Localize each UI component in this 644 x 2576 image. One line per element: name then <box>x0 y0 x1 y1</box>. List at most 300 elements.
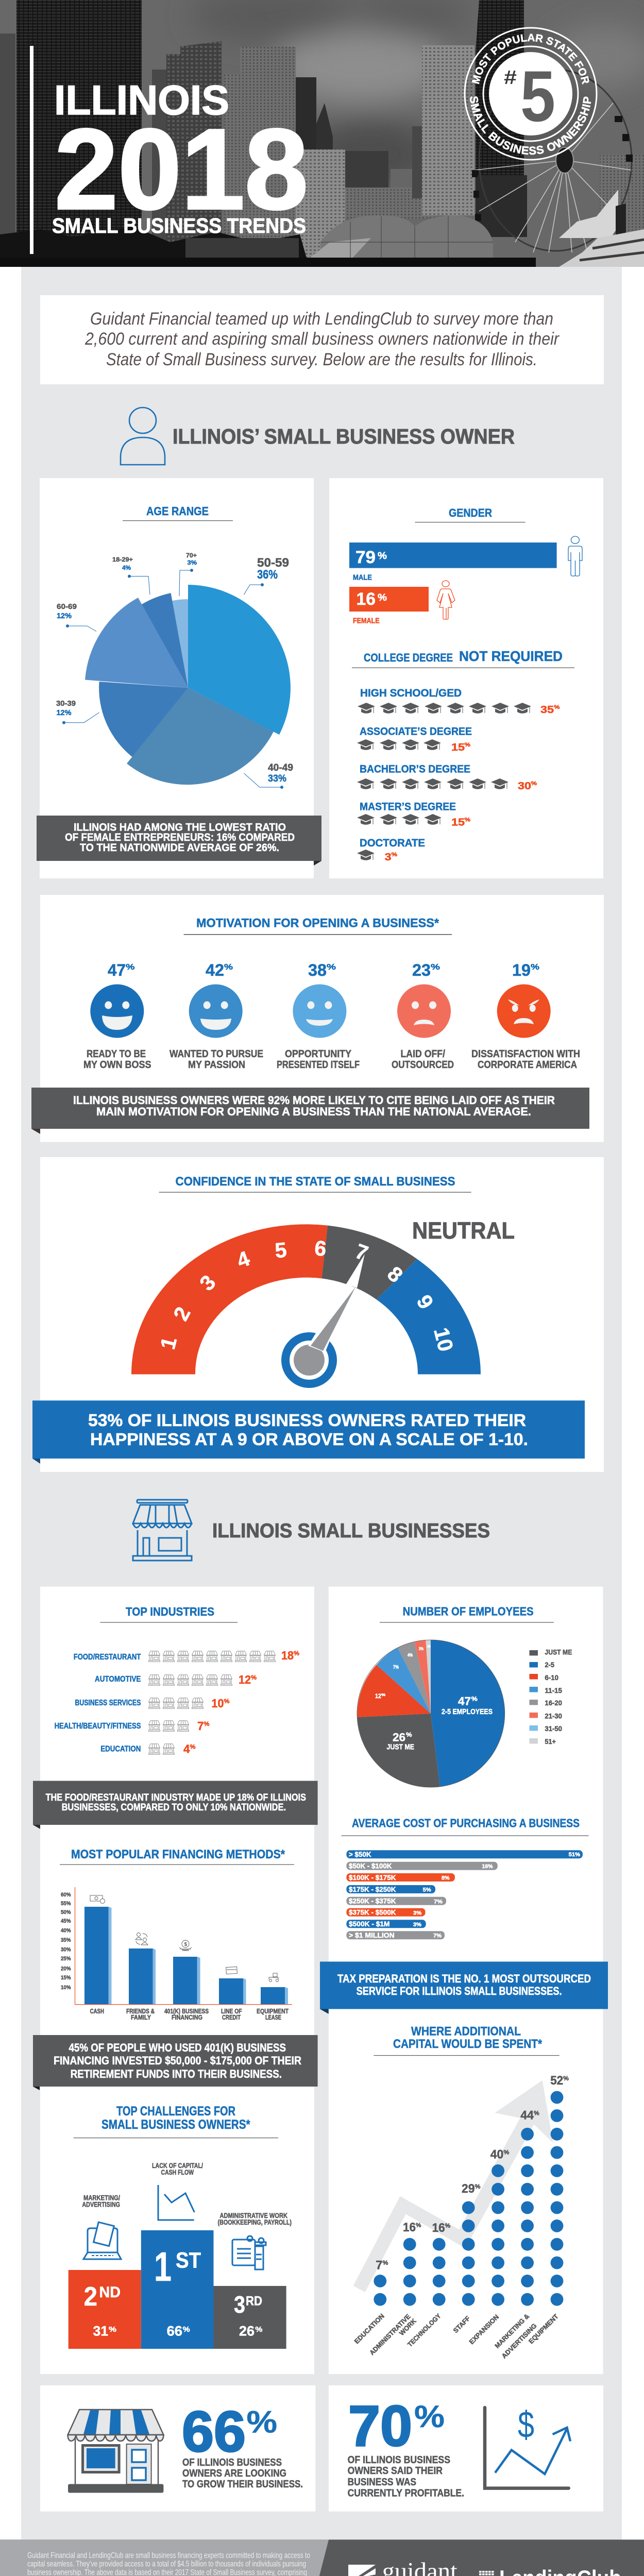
dot chart percentages: 44 <box>520 2108 534 2122</box>
motivation: 19% dissatisfaction: CORPORATE AMERICA <box>478 1059 577 1071</box>
podium: challenges: CASH FLOW <box>161 2168 194 2176</box>
pie labels: 4% <box>122 564 131 571</box>
callout: tax preparation: TAX PREPARATION IS THE NO. 1 MOST OUTSOURCED <box>337 1972 591 1985</box>
motivation: 19% dissatisfaction: DISSATISFACTION WITH <box>471 1048 580 1060</box>
pie chart: employees: % <box>381 1693 386 1697</box>
gauge: 8 <box>383 1262 408 1287</box>
badge: #5 most popular state: SMALL BUSINESS OWNERSHIP <box>470 96 591 155</box>
callout: happiness: HAPPINESS AT A 9 OR ABOVE ON A SCALE OF 1-10. <box>90 1430 528 1449</box>
bar chart: financing methods: 45% <box>61 1918 71 1924</box>
degree row: associate's: % <box>465 742 470 748</box>
bar chart: average cost: $375K - $500K <box>349 1908 396 1917</box>
bar chart: average cost: $100K - $175K <box>349 1873 396 1882</box>
podium: 2nd: 31 <box>93 2323 108 2338</box>
motivation: 38% opportunity: OPPORTUNITY <box>285 1048 352 1060</box>
icon: storefront outline <box>133 1500 192 1561</box>
bar chart: financing methods: 60% <box>61 1892 71 1898</box>
heading: college degree not required: COLLEGE DEGREE <box>364 651 453 664</box>
industry row: health <box>55 1719 210 1733</box>
heading: additional capital: WHERE ADDITIONAL <box>411 2025 521 2039</box>
hero photo: Chicago skyline <box>0 0 644 267</box>
industry row: food <box>74 1649 299 1662</box>
bar chart: financing methods: CASH <box>90 2008 104 2015</box>
podium: challenges: ADMINISTRATIVE WORK <box>219 2211 287 2219</box>
degree row: doctorate: 3 <box>385 852 392 863</box>
dot chart percentages: 16 <box>403 2221 416 2234</box>
dot chart category labels <box>353 2312 560 2360</box>
heading: additional capital <box>393 2025 543 2051</box>
pie chart: employees: 1% <box>428 1645 431 1649</box>
pie chart: age range <box>85 585 291 785</box>
bar chart: financing methods: 30% <box>61 1946 71 1953</box>
podium: 2nd: % <box>109 2325 116 2334</box>
heading: motivation: MOTIVATION FOR OPENING A BUSINESS* <box>196 917 439 930</box>
heading: confidence: CONFIDENCE IN THE STATE OF SMALL BUSINESS <box>175 1175 455 1189</box>
podium: challenges: (BOOKKEEPING, PAYROLL) <box>217 2218 292 2226</box>
heading: additional capital: CAPITAL WOULD BE SPENT* <box>393 2037 543 2051</box>
bar chart: average cost: 7% <box>433 1933 442 1939</box>
callout: female entrepreneurs: ILLINOIS HAD AMONG THE LOWEST RATIO <box>74 821 286 834</box>
motivation: 42% pursue my passion: 42 <box>206 961 224 979</box>
gauge: 7 <box>352 1239 371 1265</box>
icon: credit card <box>226 1967 237 1974</box>
pie labels: 60-69 <box>57 602 77 611</box>
icon: laptop <box>83 2222 121 2259</box>
industry row: business services <box>75 1697 230 1710</box>
podium: 1st: ST <box>176 2248 201 2273</box>
motivation: 19% dissatisfaction: % <box>531 963 539 972</box>
pie labels: 36% <box>257 568 278 582</box>
heading: number of employees: NUMBER OF EMPLOYEES <box>403 1605 534 1618</box>
column: equipment <box>551 2091 563 2306</box>
icon: profit chart <box>485 2404 570 2488</box>
dot chart category labels: EQUIPMENT <box>527 2312 560 2345</box>
pie leader lines <box>62 569 283 789</box>
degree row: associate's <box>357 725 472 753</box>
callout: food industry: BUSINESSES, COMPARED TO ONLY 10% NATIONWIDE. <box>62 1802 286 1813</box>
heading: college degree not required: NOT REQUIRED <box>459 648 563 664</box>
degree row: doctorate: % <box>392 852 397 858</box>
callout: 401k: 45% OF PEOPLE WHO USED 401(K) BUSINESS <box>69 2041 286 2054</box>
pie chart: employees: 3% <box>419 1647 423 1651</box>
callout: laid off <box>31 1088 589 1134</box>
dot chart percentages: 29 <box>462 2182 475 2196</box>
pie labels: 3% <box>188 559 197 566</box>
pie chart: employees <box>357 1640 505 1787</box>
degree row: master's <box>357 801 470 828</box>
dot chart percentages: % <box>563 2075 569 2082</box>
icon: cash <box>90 1895 105 1903</box>
industry row: automotive: 12 <box>239 1673 251 1686</box>
motivation: 47% ready to be my own boss <box>83 961 151 1071</box>
legend: employees: 11-15 <box>545 1686 562 1694</box>
pie labels <box>56 552 293 784</box>
panel: intro: State of Small Business survey. Below are the results for Illinois. <box>106 350 537 369</box>
badge: #5 most popular state <box>464 27 598 161</box>
dot chart percentages: % <box>416 2222 421 2229</box>
bar chart: financing methods: FAMILY <box>131 2014 151 2021</box>
industry row: business services: BUSINESS SERVICES <box>75 1699 141 1707</box>
panel: intro: 2,600 current and aspiring small business owners nationwide in their <box>84 329 560 349</box>
motivation: 42% pursue my passion: MY PASSION <box>188 1059 245 1071</box>
heading: top challenges <box>101 2104 250 2132</box>
gauge: 10 <box>429 1325 458 1354</box>
industry row: education <box>100 1742 196 1756</box>
hero accent bar <box>30 46 33 254</box>
legend: employees: JUST ME <box>545 1648 572 1656</box>
gauge: 6 <box>314 1236 327 1261</box>
industry row: food: % <box>294 1650 299 1657</box>
stat: 70% <box>348 2394 464 2499</box>
legend: employees: 6-10 <box>545 1673 558 1682</box>
female bar: FEMALE <box>353 616 380 625</box>
bar chart: average cost: 5% <box>423 1887 431 1893</box>
dot chart category labels: EDUCATION <box>353 2312 386 2345</box>
legend: employees: 51+ <box>545 1737 556 1745</box>
heading: top challenges: TOP CHALLENGES FOR <box>116 2104 235 2119</box>
stat: 66% <box>182 2400 303 2490</box>
bar chart: average cost: 51% <box>569 1852 580 1858</box>
panel: age range <box>40 478 314 878</box>
pie labels: 12% <box>57 612 72 620</box>
bar chart: average cost: $50K - $100K <box>349 1862 392 1870</box>
degree row: master's: 15 <box>451 817 465 828</box>
dot chart category labels: MARKETING & <box>493 2312 531 2350</box>
podium: 1st: 1 <box>154 2244 172 2290</box>
industry row: food: 18 <box>281 1649 294 1662</box>
industry row: health: 7 <box>197 1719 204 1733</box>
footer <box>0 2539 644 2576</box>
dot chart percentages: % <box>475 2183 481 2190</box>
stat: 66%: TO GROW THEIR BUSINESS. <box>182 2479 303 2490</box>
bar chart: financing methods: 10% <box>61 1985 71 1991</box>
degree row: bachelor's: % <box>531 781 537 787</box>
bar chart: financing methods: 35% <box>61 1937 71 1943</box>
male bar <box>349 543 557 582</box>
motivation: 23% laid off: LAID OFF/ <box>401 1048 445 1060</box>
icon: female <box>437 581 455 619</box>
stat: 70%: OWNERS SAID THEIR <box>348 2465 443 2477</box>
podium: 3rd: RD <box>246 2294 262 2309</box>
industry row: business services: % <box>224 1698 230 1705</box>
industry row: automotive <box>95 1673 257 1686</box>
callout: food industry <box>33 1781 318 1829</box>
motivation: 19% dissatisfaction <box>471 961 580 1071</box>
stat: 66%: OWNERS ARE LOOKING <box>182 2468 286 2479</box>
bar chart: average cost: 8% <box>442 1875 450 1882</box>
bar chart: average cost: > $50K <box>349 1850 371 1858</box>
gauge <box>131 1224 481 1388</box>
pie labels: 33% <box>268 773 286 784</box>
motivation: 42% pursue my passion: WANTED TO PURSUE <box>170 1048 263 1060</box>
degree row: doctorate: DOCTORATE <box>360 837 425 849</box>
pie chart: employees: 2-5 EMPLOYEES <box>442 1707 493 1716</box>
gauge: 1 <box>156 1334 181 1352</box>
legend: employees <box>530 1648 572 1745</box>
bar chart: average cost: 3% <box>413 1922 421 1928</box>
degree row: bachelor's: 30 <box>518 781 531 792</box>
pie labels: 12% <box>57 708 71 717</box>
pie chart: employees: % <box>471 1696 478 1703</box>
pie labels: 50-59 <box>257 556 289 570</box>
bar chart: average cost: 16% <box>482 1863 493 1870</box>
motivation: 38% opportunity: % <box>327 963 336 972</box>
stat: 70%: BUSINESS WAS <box>348 2477 416 2488</box>
industry row: business services: 10 <box>211 1697 224 1710</box>
degree row: master's: MASTER’S DEGREE <box>360 801 456 813</box>
column: technology <box>433 2238 446 2306</box>
footer text: capital seamless. They’ve provided access to a total of $4.5 billion to thousands of individuals pursuing <box>27 2560 306 2569</box>
heading: average cost: AVERAGE COST OF PURCHASING A BUSINESS <box>352 1817 580 1830</box>
legend: employees: 31-50 <box>545 1724 562 1733</box>
motivation: 47% ready to be my own boss: % <box>126 963 135 972</box>
dot chart percentages: % <box>445 2222 450 2229</box>
male bar: MALE <box>353 573 372 582</box>
bar chart: financing methods: CREDIT <box>222 2014 241 2021</box>
gauge: 2 <box>168 1303 195 1325</box>
panel: motivation <box>31 895 604 1142</box>
podium: 2nd <box>69 2270 141 2349</box>
bar chart: financing methods: 55% <box>61 1901 71 1907</box>
dot chart percentages: 40 <box>490 2148 503 2162</box>
column: administrative <box>403 2238 416 2306</box>
panel: 66% looking to grow <box>40 2385 315 2512</box>
bar chart: financing methods: FRIENDS & <box>126 2008 155 2015</box>
stat: 70%: OF ILLINOIS BUSINESS <box>348 2454 450 2466</box>
dot chart percentages: 7 <box>376 2259 382 2272</box>
heading: gender: GENDER <box>449 506 492 519</box>
bar chart: average cost: > $1 MILLION <box>349 1931 395 1939</box>
bar chart: financing methods: 50% <box>61 1909 71 1916</box>
female bar: 16 <box>357 589 376 609</box>
panel: right column businesses <box>320 1587 608 2374</box>
callout: laid off: ILLINOIS BUSINESS OWNERS WERE 92% MORE LIKELY TO CITE BEING LAID OFF AS THEIR <box>73 1094 555 1107</box>
title: ILLINOIS <box>54 77 229 124</box>
motivation: 42% pursue my passion: % <box>224 963 233 972</box>
dot chart percentages: 52 <box>550 2074 563 2088</box>
icon: declining chart <box>158 2185 194 2220</box>
badge: #5 most popular state: 5 <box>520 56 555 137</box>
degree row: high school: HIGH SCHOOL/GED <box>360 687 462 699</box>
dot chart category labels: WORK <box>398 2317 418 2337</box>
bar chart: financing methods <box>61 1887 292 2021</box>
icon: notes <box>232 2236 266 2269</box>
heading: financing methods: MOST POPULAR FINANCING METHODS* <box>71 1848 285 1861</box>
bar chart: financing methods: 401(K) BUSINESS <box>164 2008 209 2015</box>
arrow: growth <box>353 2080 553 2292</box>
dot chart category labels: TECHNOLOGY <box>406 2312 443 2348</box>
industry row: education: % <box>190 1743 196 1751</box>
bar chart: financing methods: 25% <box>61 1956 71 1962</box>
gauge: 4 <box>233 1246 253 1273</box>
icon: storefront <box>68 2410 163 2493</box>
heading: top industries: TOP INDUSTRIES <box>126 1605 214 1618</box>
column: expansion <box>492 2164 504 2306</box>
pie chart: employees: 4% <box>408 1653 413 1658</box>
bar chart: average cost <box>346 1850 583 1939</box>
degree row: high school <box>358 687 560 716</box>
podium: 2nd: ND <box>99 2284 121 2301</box>
title: 2018 <box>55 106 308 233</box>
motivation: 19% dissatisfaction: 19 <box>512 961 531 979</box>
stat: 70%: % <box>414 2399 445 2434</box>
industry row: food: FOOD/RESTAURANT <box>74 1653 141 1662</box>
heading: age range: AGE RANGE <box>146 504 209 518</box>
footer text <box>27 2551 310 2576</box>
bar chart: financing methods: LEASE <box>265 2014 281 2021</box>
bar chart: financing methods: 20% <box>61 1966 71 1972</box>
podium: 3rd: 26 <box>239 2323 255 2338</box>
icon: profit chart: $ <box>518 2404 534 2446</box>
dot chart percentages: % <box>534 2109 539 2116</box>
stat: 66%: 66 <box>182 2400 246 2464</box>
pie chart: employees: 12 <box>375 1692 381 1700</box>
callout: female entrepreneurs <box>37 816 321 866</box>
column: education <box>374 2275 386 2306</box>
motivation: 42% pursue my passion <box>170 961 263 1071</box>
female bar: % <box>378 592 387 603</box>
pie chart: employees: JUST ME <box>386 1742 414 1751</box>
motivation: 23% laid off: 23 <box>412 961 431 979</box>
stat: 66%: OF ILLINOIS BUSINESS <box>182 2457 282 2468</box>
podium: challenges <box>69 2161 292 2349</box>
pie labels: 30-39 <box>56 699 76 708</box>
bar chart: average cost: $175K - $250K <box>349 1885 396 1893</box>
stat: 70%: 70 <box>348 2394 412 2458</box>
degree row: associate's: ASSOCIATE’S DEGREE <box>360 725 472 738</box>
motivation: 23% laid off: OUTSOURCED <box>392 1059 454 1071</box>
degree row: master's: % <box>465 817 470 823</box>
degree row: high school: % <box>554 704 560 710</box>
callout: 401k: FINANCING INVESTED $50,000 - $175,000 OF THEIR <box>54 2054 301 2067</box>
icon: equipment <box>269 1973 278 1981</box>
footer text: Guidant Financial and LendingClub are small business financing experts committed to making access to <box>27 2551 310 2560</box>
gauge: 9 <box>412 1291 438 1313</box>
podium: challenges: LACK OF CAPITAL/ <box>152 2161 203 2170</box>
pie chart: employees: 26 <box>393 1731 405 1743</box>
male bar: % <box>378 551 387 562</box>
bar chart: average cost: $500K - $1M <box>349 1920 389 1928</box>
male bar: 79 <box>355 548 376 567</box>
callout: 401k <box>33 2035 318 2090</box>
logo: Guidant Financial <box>348 2558 457 2576</box>
gauge label: neutral: NEUTRAL <box>412 1217 515 1244</box>
motivation: 38% opportunity <box>277 961 360 1071</box>
panel: intro: Guidant Financial teamed up with LendingClub to survey more than <box>90 309 553 329</box>
podium: 3rd: % <box>255 2325 262 2334</box>
motivation: 23% laid off <box>392 961 454 1071</box>
industry row: health: % <box>204 1720 210 1727</box>
podium: challenges: MARKETING/ <box>83 2194 120 2202</box>
heading: top challenges: SMALL BUSINESS OWNERS* <box>101 2117 250 2132</box>
motivation: 47% ready to be my own boss: 47 <box>108 961 126 979</box>
podium: 3rd <box>213 2286 286 2349</box>
legend: employees: 21-30 <box>545 1711 562 1720</box>
pie labels: 70+ <box>186 552 197 559</box>
dot chart category labels: EXPANSION <box>468 2313 500 2346</box>
bar chart: financing methods: EQUIPMENT <box>257 2008 289 2015</box>
motivation: 47% ready to be my own boss: MY OWN BOSS <box>83 1059 151 1071</box>
panel: 70% profitable <box>329 2385 603 2512</box>
dot chart percentages: 16 <box>432 2221 445 2235</box>
bar chart: financing methods: LINE OF <box>221 2008 242 2015</box>
bar chart: financing methods: FINANCING <box>172 2014 202 2021</box>
podium: 1st <box>141 2230 213 2349</box>
panel: gender and college degree <box>329 478 603 878</box>
industry row: education: 4 <box>183 1742 190 1756</box>
title: SMALL BUSINESS TRENDS <box>52 214 306 238</box>
callout: 401k: RETIREMENT FUNDS INTO THEIR BUSINESS. <box>71 2067 282 2080</box>
bar chart: average cost: 3% <box>413 1910 422 1917</box>
podium: 2nd: 2 <box>84 2282 97 2312</box>
motivation: 23% laid off: % <box>431 963 440 972</box>
degree row: doctorate <box>357 837 425 863</box>
pie chart: employees: 47 <box>458 1695 471 1708</box>
heading: college degree not required <box>364 648 563 664</box>
legend: employees: 2-5 <box>545 1660 554 1669</box>
podium: 1st: % <box>183 2325 190 2334</box>
stat: 70%: CURRENTLY PROFITABLE. <box>348 2488 464 2499</box>
dot chart category labels: ADMINISTRATIVE <box>368 2312 412 2357</box>
bar chart: financing methods: 40% <box>61 1928 71 1934</box>
legend: employees: 16-20 <box>545 1699 562 1707</box>
gauge: 5 <box>274 1238 287 1263</box>
pie labels: 18-29+ <box>112 556 133 563</box>
gauge: 3 <box>195 1270 220 1295</box>
callout: tax preparation: SERVICE FOR ILLINOIS SMALL BUSINESSES. <box>357 1985 562 1997</box>
industry row: automotive: AUTOMOTIVE <box>95 1675 141 1684</box>
icon: male <box>568 536 582 576</box>
callout: happiness <box>32 1400 585 1464</box>
female bar <box>349 587 429 625</box>
icon: friends and family <box>135 1933 148 1945</box>
panel: intro <box>40 295 604 384</box>
bar chart: financing methods: 15% <box>61 1975 71 1981</box>
degree row: bachelor's <box>357 764 537 792</box>
motivation: 38% opportunity: PRESENTED ITSELF <box>277 1059 360 1071</box>
motivation: 38% opportunity: 38 <box>308 961 327 979</box>
dot chart: capital use <box>374 2091 563 2306</box>
motivation: 47% ready to be my own boss: READY TO BE <box>87 1048 146 1060</box>
stat: 66%: % <box>246 2405 277 2439</box>
badge: #5 most popular state: # <box>504 67 517 89</box>
podium: challenges: ADVERTISING <box>82 2200 120 2208</box>
section heading: small businesses: ILLINOIS SMALL BUSINESSES <box>212 1520 490 1542</box>
callout: food industry: THE FOOD/RESTAURANT INDUSTRY MADE UP 18% OF ILLINOIS <box>45 1792 306 1803</box>
panel: left column businesses <box>33 1587 318 2374</box>
industry row: health: HEALTH/BEAUTY/FITNESS <box>55 1722 141 1731</box>
gauge hub and needle <box>281 1254 365 1388</box>
callout: tax preparation <box>320 1962 608 2014</box>
badge: #5 most popular state: MOST POPULAR STATE FOR <box>472 34 589 84</box>
dot chart percentages <box>376 2074 569 2272</box>
pie chart: employees: % <box>406 1731 412 1738</box>
section heading: small business owner: ILLINOIS’ SMALL BUSINESS OWNER <box>173 425 515 448</box>
dot chart category labels: STAFF <box>452 2314 471 2334</box>
icon: person outline <box>121 408 165 465</box>
callout: laid off: MAIN MOTIVATION FOR OPENING A BUSINESS THAN THE NATIONAL AVERAGE. <box>96 1105 531 1118</box>
pie labels: 40-49 <box>268 762 293 773</box>
callout: female entrepreneurs: OF FEMALE ENTREPRENEURS: 16% COMPARED <box>65 832 295 843</box>
column: staff <box>462 2201 475 2306</box>
degree row: bachelor's: BACHELOR’S DEGREE <box>360 764 470 775</box>
callout: happiness: 53% OF ILLINOIS BUSINESS OWNERS RATED THEIR <box>88 1411 526 1430</box>
icon: nest egg <box>179 1940 192 1951</box>
dot chart percentages: % <box>382 2259 388 2266</box>
column: marketing <box>521 2128 534 2306</box>
dot chart category labels: ADVERTISING <box>500 2321 538 2360</box>
icon: nest egg: $ <box>184 1942 188 1947</box>
